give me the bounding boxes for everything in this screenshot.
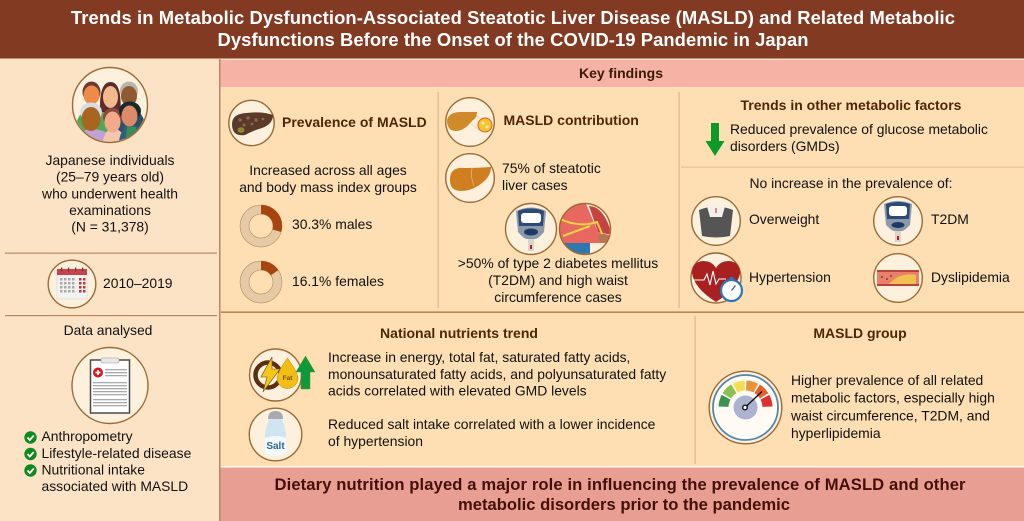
text: T2DM: T2DM [931, 211, 969, 227]
icon: fatty liver dark [229, 100, 274, 146]
text: higher prevalence: waist circumference, T2DM, and [790, 408, 990, 424]
text: reduced GMD prevalence [730, 121, 988, 154]
panel: national nutrients trend [249, 325, 666, 461]
icon: gauge [709, 371, 782, 444]
text: 75 percent: liver cases [502, 177, 568, 193]
icon: salt shaker: Salt [266, 441, 285, 452]
icon: energy and fat: Fat [283, 375, 293, 382]
list: data types [24, 428, 192, 494]
panel: trends in other metabolic factors [681, 97, 1024, 303]
conclusion banner: Dietary nutrition played a major role in influencing the prevalence of MASLD and other [274, 475, 966, 494]
icon: group of people [72, 68, 148, 148]
chart: males donut 30.3% [244, 205, 282, 242]
text: over 50 percent: (T2DM) and high waist [488, 272, 628, 288]
panel: MASLD contribution [446, 98, 658, 305]
text: reduced salt [328, 416, 656, 449]
text: population description: (N = 31,378) [71, 219, 149, 235]
text: higher prevalence [790, 372, 995, 441]
panel: prevalence of MASLD [229, 100, 427, 298]
icon: glucose meter small [874, 197, 922, 245]
text: females: 16.1% females [292, 273, 384, 289]
key findings banner: Key findings [579, 65, 663, 81]
icon: weighing scale [692, 197, 740, 245]
text: reduced salt: Reduced salt intake correlated with a lower incidence [328, 416, 656, 432]
icon: green down arrow [706, 123, 724, 156]
heading: prevalence of MASLD: Prevalence of MASLD [282, 114, 427, 130]
header banner: Trends in Metabolic Dysfunction-Associated Steatotic Liver Disease (MASLD) and Related Metabolic [71, 7, 955, 28]
text: overweight: Overweight [749, 211, 819, 227]
panel: study population and data sidebar [0, 59, 220, 521]
text: increased across groups: Increased across all ages [249, 162, 407, 178]
text: over 50 percent: circumference cases [494, 289, 622, 305]
text: 75 percent: 75% of steatotic [502, 160, 601, 176]
text: energy and fat increase: monounsaturated fatty acids, and polyunsaturated fatty [328, 366, 666, 382]
conclusion banner: metabolic disorders prior to the pandemic [458, 495, 790, 514]
text: reduced GMD prevalence: Reduced prevalence of glucose metabolic [730, 121, 988, 137]
icon: waist measurement [560, 204, 615, 257]
text: population description [41, 152, 178, 235]
panel: key findings body [220, 88, 1024, 466]
text: energy and fat increase [328, 349, 666, 398]
text: energy and fat increase: acids correlated with elevated GMD levels [328, 382, 587, 398]
chart: females donut 16.1% [244, 261, 278, 298]
text: over 50 percent [458, 255, 658, 305]
key findings banner [220, 60, 1024, 87]
list: data types: Nutritional intake [42, 462, 145, 478]
list: data types: Lifestyle-related disease [42, 445, 192, 461]
text: reduced GMD prevalence: disorders (GMDs) [730, 138, 840, 154]
panel: MASLD group [709, 325, 995, 444]
text: over 50 percent: >50% of type 2 diabetes mellitus [458, 255, 658, 271]
text: study period: 2010–2019 [103, 275, 173, 291]
heading: MASLD group: MASLD group [813, 325, 907, 341]
header banner [0, 0, 1024, 58]
icon: green up arrow [296, 356, 315, 389]
text: population description: examinations [69, 202, 151, 218]
heading: MASLD contribution: MASLD contribution [504, 112, 639, 128]
icon: steatotic liver [446, 154, 494, 202]
icon: energy and fat [250, 349, 302, 401]
list: data types: associated with MASLD [42, 478, 188, 494]
list: data types: Anthropometry [42, 428, 133, 444]
icon: salt shaker [249, 408, 302, 461]
heading: trends: Trends in other metabolic factors [741, 97, 962, 113]
text: 75 percent [502, 160, 601, 193]
header banner: Dysfunctions Before the Onset of the COVID-19 Pandemic in Japan [218, 29, 808, 50]
icon: liver with fat cells [446, 98, 494, 146]
text: population description: (25–79 years old) [56, 169, 164, 185]
text: population description: who underwent health [41, 185, 178, 201]
conclusion banner [220, 466, 1024, 521]
heading: national nutrients trend: National nutrients trend [380, 325, 538, 341]
text: population description: Japanese individuals [46, 152, 175, 168]
icon: heart with stopwatch [691, 253, 742, 303]
text: increased across groups [239, 162, 417, 195]
heading: data analysed: Data analysed [64, 322, 152, 338]
text: dyslipidemia: Dyslipidemia [931, 269, 1010, 285]
text: increased across groups: and body mass index groups [239, 179, 417, 195]
icon: artery plaque [874, 254, 922, 302]
text: energy and fat increase: Increase in energy, total fat, saturated fatty acids, [328, 349, 630, 365]
text: males: 30.3% males [292, 216, 372, 232]
text: reduced salt: of hypertension [328, 433, 423, 449]
text: higher prevalence: hyperlipidemia [791, 425, 881, 441]
text: no increase: No increase in the prevalence of: [749, 175, 953, 191]
icon: calendar [48, 260, 96, 308]
text: hypertension: Hypertension [749, 269, 831, 285]
icon: clipboard [72, 348, 148, 424]
text: higher prevalence: metabolic factors, especially high [791, 390, 995, 406]
text: higher prevalence: Higher prevalence of all related [791, 372, 983, 388]
icon: glucose meter [506, 204, 556, 254]
